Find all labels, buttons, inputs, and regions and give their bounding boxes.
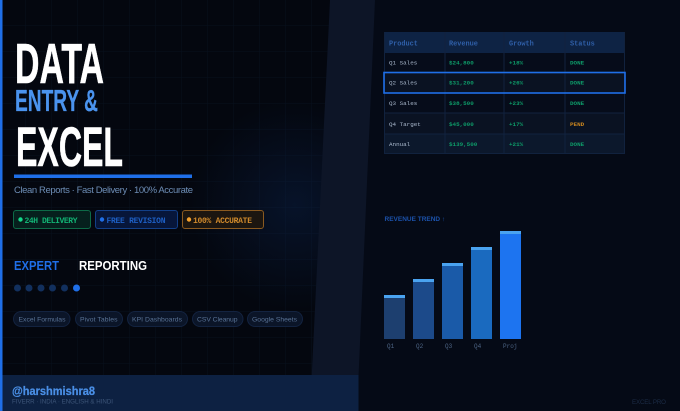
table rows: $45,000: [449, 121, 474, 128]
badge: free revision: FREE REVISION: [106, 217, 166, 226]
bar labels: Q3: [445, 343, 453, 350]
table header: [384, 32, 625, 53]
data table: [384, 32, 625, 154]
bar labels: Q4: [474, 343, 482, 350]
bar labels: Q2: [416, 343, 424, 350]
title underline: [14, 174, 192, 178]
table rows: +23%: [509, 100, 524, 107]
badge: free revision: [96, 210, 178, 228]
footer bar: [2, 375, 358, 411]
table rows: DONE: [570, 100, 585, 107]
badge: 100% accurate: 100% ACCURATE: [193, 217, 252, 226]
table rows: PEND: [570, 121, 585, 128]
bar labels: [387, 343, 517, 350]
footer details: FIVERR · INDIA · ENGLISH & HINDI: [12, 398, 113, 406]
table rows: $24,800: [449, 60, 474, 66]
handle: @harshmishra8: [12, 386, 96, 398]
badge: 24h delivery: 24H DELIVERY: [24, 217, 78, 226]
table rows: Q1 Sales: [389, 60, 418, 66]
left accent bar: [0, 0, 2, 411]
table rows: Q4 Target: [389, 121, 421, 128]
table rows: +26%: [509, 80, 524, 86]
subtitle: Clean Reports · Fast Delivery · 100% Accurate: [14, 185, 193, 196]
table rows: DONE: [570, 141, 585, 148]
slanted band: [310, 0, 375, 411]
table rows: Annual: [389, 141, 411, 148]
table header: Revenue: [449, 40, 478, 48]
badges: [14, 210, 264, 228]
highlighted row: [384, 72, 625, 93]
title: EXCEL: [16, 115, 123, 178]
expert reporting heading: [14, 258, 147, 273]
bar labels: Proj: [503, 343, 517, 350]
bar chart: [384, 231, 521, 350]
table rows: [389, 60, 585, 148]
panel: left title area: [0, 0, 331, 411]
table rows: +17%: [509, 121, 524, 128]
table rows: DONE: [570, 80, 585, 86]
expert reporting heading: REPORTING: [79, 258, 147, 273]
skill pills: Excel Formulas: [18, 316, 66, 324]
table header: Growth: [509, 40, 534, 48]
table header: Product: [389, 40, 418, 48]
table rows: DONE: [570, 60, 585, 66]
expert reporting heading: EXPERT: [14, 258, 59, 273]
title: ENTRY &: [15, 83, 98, 118]
table rows: Q3 Sales: [389, 100, 418, 107]
skill pills: Pivot Tables: [80, 316, 118, 324]
badge: 100% accurate: [182, 210, 264, 228]
table rows: $31,200: [449, 80, 474, 86]
bar labels: Q1: [387, 343, 395, 350]
table rows: +21%: [509, 141, 524, 148]
skill pills: [14, 312, 302, 326]
title: [15, 32, 123, 178]
table header: Status: [570, 40, 595, 48]
skill pills: Google Sheets: [252, 316, 298, 324]
table rows: $139,500: [449, 141, 478, 148]
table rows: Q2 Sales: [389, 80, 418, 86]
skill pills: CSV Cleanup: [197, 316, 238, 324]
progress dots: [14, 284, 80, 292]
table rows: $38,500: [449, 100, 474, 107]
badge: 24h delivery: [14, 210, 90, 228]
chart title: REVENUE TREND ↑: [384, 216, 445, 223]
table grid: [384, 32, 625, 154]
title: DATA: [15, 32, 104, 96]
table rows: +18%: [509, 60, 524, 66]
watermark: EXCEL PRO: [632, 399, 666, 406]
skill pills: KPI Dashboards: [132, 316, 183, 324]
